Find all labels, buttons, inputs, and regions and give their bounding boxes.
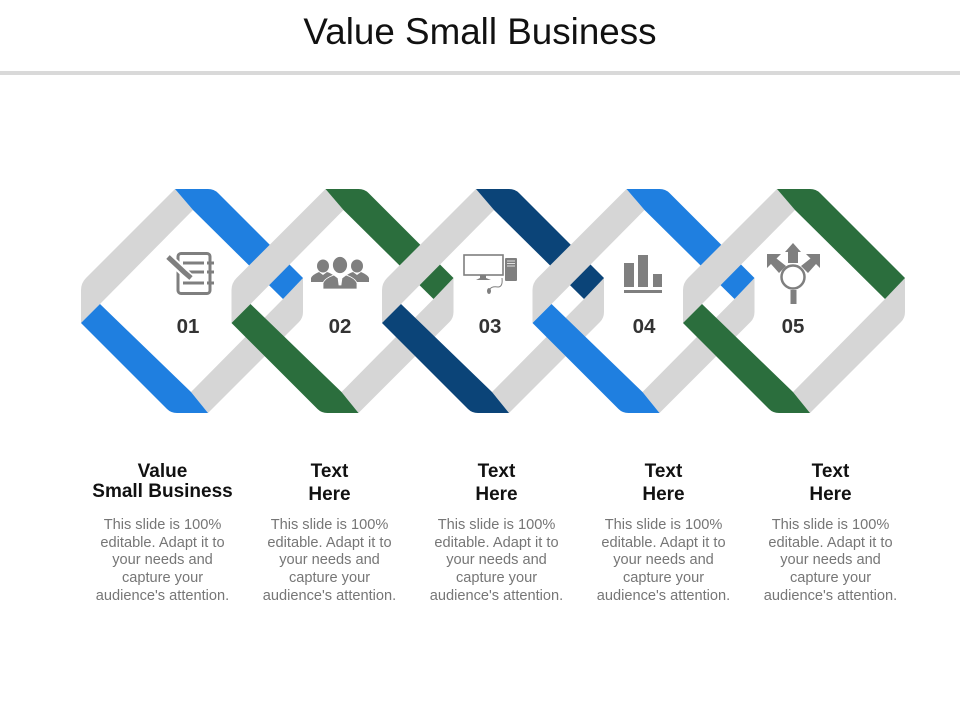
column 3 text: Here: [475, 484, 518, 505]
column 5 text: This slide is 100%: [772, 517, 889, 533]
column 1 text: Small Business: [92, 481, 233, 502]
column 3 text: your needs and: [446, 552, 547, 568]
step numbers: 01: [177, 315, 199, 338]
column 4 text: [597, 461, 730, 604]
column 4 text: capture your: [623, 570, 704, 586]
step numbers: [177, 315, 804, 338]
column 3 text: editable. Adapt it to: [434, 535, 559, 551]
column 2 text: audience's attention.: [263, 588, 396, 604]
column 1 text: Value: [138, 461, 187, 482]
icon: bar chart: [624, 255, 662, 293]
column 1 text: editable. Adapt it to: [100, 535, 225, 551]
column 1 text: audience's attention.: [96, 588, 229, 604]
column 4 text: your needs and: [613, 552, 714, 568]
column 2 text: This slide is 100%: [271, 517, 388, 533]
link 3: [382, 189, 604, 413]
column 5 text: [764, 461, 897, 604]
column 4 text: Text: [645, 461, 683, 482]
column 3 text: audience's attention.: [430, 588, 563, 604]
title: Value Small Business: [303, 11, 657, 52]
icon: desktop computer: [464, 255, 517, 294]
column 2 text: Text: [311, 461, 349, 482]
link 1: [81, 189, 303, 413]
column 1 text: your needs and: [112, 552, 213, 568]
column 3 text: Text: [478, 461, 516, 482]
column 2 text: Here: [308, 484, 351, 505]
step numbers: 04: [633, 315, 656, 338]
column 2 text: editable. Adapt it to: [267, 535, 392, 551]
column 3 text: [430, 461, 563, 604]
column 5 text: your needs and: [780, 552, 881, 568]
icon: business team: [311, 256, 369, 289]
column 5 text: Text: [812, 461, 850, 482]
column 2 text: [263, 461, 396, 604]
column 4 text: audience's attention.: [597, 588, 730, 604]
column 5 text: editable. Adapt it to: [768, 535, 893, 551]
step numbers: 03: [479, 315, 501, 338]
link 4: [532, 189, 754, 413]
link 5: [683, 189, 905, 413]
column 5 text: Here: [809, 484, 852, 505]
column 4 text: Here: [642, 484, 685, 505]
icon: notebook and pen: [168, 254, 214, 294]
step numbers: 02: [329, 315, 351, 338]
column 4 text: This slide is 100%: [605, 517, 722, 533]
link 2: [232, 189, 454, 413]
column 2 text: capture your: [289, 570, 370, 586]
column 1 text: This slide is 100%: [104, 517, 221, 533]
chain of five links: [81, 189, 905, 413]
icon: magnifier with arrows: [767, 243, 820, 304]
column 1 text: [92, 461, 233, 604]
column 3 text: capture your: [456, 570, 537, 586]
column 2 text: your needs and: [279, 552, 380, 568]
column 5 text: audience's attention.: [764, 588, 897, 604]
column 5 text: capture your: [790, 570, 871, 586]
column 4 text: editable. Adapt it to: [601, 535, 726, 551]
column 3 text: This slide is 100%: [438, 517, 555, 533]
column 1 text: capture your: [122, 570, 203, 586]
step numbers: 05: [782, 315, 804, 338]
